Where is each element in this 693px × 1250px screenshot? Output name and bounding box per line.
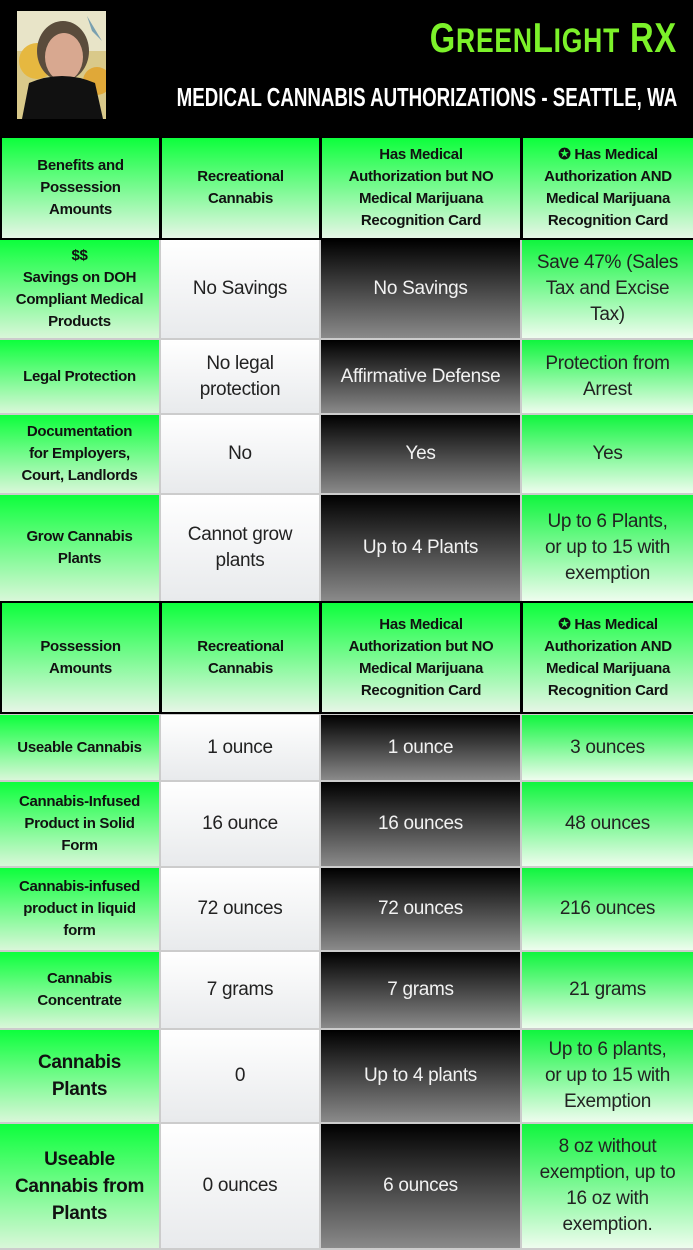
header row 2 <box>0 601 693 714</box>
header row 1: Medical Marijuana <box>546 190 670 207</box>
row: liquid form: 72 ounces <box>198 898 282 919</box>
subtitle: MEDICAL CANNABIS AUTHORIZATIONS - SEATTLE, WA <box>176 82 677 112</box>
header row 1: Recognition Card <box>548 212 668 229</box>
header row 2: Cannabis <box>208 660 273 676</box>
row: useable from plants: exemption, up to <box>540 1162 675 1183</box>
header row 1: ✪ Has Medical <box>558 146 658 163</box>
row: solid form: 16 ounce <box>202 813 278 834</box>
header row 1: Has Medical <box>379 146 463 163</box>
row: legal protection: Protection from <box>545 352 670 374</box>
title: GREENLIGHT RX <box>430 14 677 61</box>
row: liquid form: 216 ounces <box>560 898 655 919</box>
row: cannabis plants: 0 <box>235 1065 245 1086</box>
header row 2: Recognition Card <box>361 682 481 698</box>
row: savings: Save 47% (Sales <box>537 252 678 273</box>
row: solid form <box>0 782 693 866</box>
row: grow plants: Grow Cannabis <box>26 528 133 545</box>
row: savings: No Savings <box>373 278 468 299</box>
row: legal protection: Affirmative Defense <box>341 366 500 386</box>
row: grow plants: Cannot grow <box>188 524 292 545</box>
row: legal protection: No legal <box>206 352 274 374</box>
row: concentrate: Cannabis <box>47 970 112 987</box>
row: grow plants <box>0 495 693 601</box>
row: savings: Tax and Excise <box>546 278 669 299</box>
row: useable cannabis: 3 ounces <box>570 736 645 758</box>
header row 1: Amounts <box>49 201 112 218</box>
row: savings: Tax) <box>590 304 625 325</box>
row: useable cannabis: 1 ounce <box>207 736 273 758</box>
row: legal protection: Arrest <box>583 378 632 400</box>
header row 1 <box>0 136 693 240</box>
row: useable from plants: 6 ounces <box>383 1175 458 1196</box>
row: legal protection: protection <box>200 378 280 400</box>
row: savings <box>0 240 693 338</box>
row: savings: Savings on DOH <box>23 269 136 286</box>
row: cannabis plants: Exemption <box>564 1091 651 1112</box>
row: cannabis plants <box>0 1030 693 1122</box>
row: useable from plants: 8 oz without <box>559 1136 656 1157</box>
row: useable from plants: exemption. <box>563 1214 652 1235</box>
row: documentation: for Employers, <box>29 445 130 462</box>
row: documentation: Yes <box>592 443 623 464</box>
header row 1: Authorization AND <box>544 168 672 185</box>
row: savings: Compliant Medical <box>16 291 143 308</box>
row: liquid form <box>0 868 693 950</box>
header row 1: Cannabis <box>208 190 273 207</box>
row: concentrate: 7 grams <box>387 979 454 1000</box>
row: liquid form: Cannabis-infused <box>19 878 140 895</box>
header row 1: Medical Marijuana <box>359 190 483 207</box>
row: useable from plants: Cannabis from <box>15 1176 144 1196</box>
header row 2: Authorization but NO <box>349 638 493 654</box>
row: savings: $$ <box>71 247 88 264</box>
row: cannabis plants: Up to 4 plants <box>364 1065 477 1086</box>
photo <box>17 11 106 119</box>
header row 2: Recreational <box>197 638 284 654</box>
row: legal protection <box>0 340 693 413</box>
row: concentrate <box>0 952 693 1028</box>
row: liquid form: form <box>63 922 96 939</box>
row: useable from plants: Useable <box>44 1148 115 1170</box>
row: useable cannabis: 1 ounce <box>388 736 453 758</box>
header row 2: ✪ Has Medical <box>558 616 658 632</box>
row: documentation: Documentation <box>27 423 132 440</box>
row: liquid form: product in liquid <box>23 900 136 917</box>
row: useable from plants: 16 oz with <box>566 1188 649 1209</box>
header row 1: Possession <box>40 179 121 196</box>
header row 2: Amounts <box>49 660 112 676</box>
row: useable cannabis <box>0 715 693 780</box>
row: useable from plants: Plants <box>52 1202 107 1224</box>
row: useable from plants <box>0 1124 693 1248</box>
row: grow plants: exemption <box>565 563 650 584</box>
row: solid form: Form <box>61 837 98 854</box>
header banner <box>0 0 693 136</box>
row: grow plants: Up to 4 Plants <box>363 537 478 558</box>
row: savings: Products <box>48 313 111 330</box>
row: documentation: Court, Landlords <box>21 467 138 484</box>
row: cannabis plants: Up to 6 plants, <box>548 1039 667 1060</box>
row: grow plants: Up to 6 Plants, <box>547 511 668 532</box>
row: liquid form: 72 ounces <box>378 898 463 919</box>
header row 2: Authorization AND <box>544 638 672 654</box>
row: concentrate: 7 grams <box>207 979 273 1000</box>
header row 1: Recreational <box>197 168 284 185</box>
header row 2: Possession <box>40 638 121 654</box>
row: cannabis plants: or up to 15 with <box>545 1065 670 1086</box>
row: solid form: Product in Solid <box>24 815 135 832</box>
header row 2: Recognition Card <box>548 682 668 698</box>
row: useable from plants: 0 ounces <box>203 1175 277 1196</box>
header row 2: Medical Marijuana <box>546 660 670 676</box>
row: concentrate: 21 grams <box>569 979 646 1000</box>
row: documentation: No <box>228 443 252 464</box>
row: concentrate: Concentrate <box>37 992 122 1009</box>
row: grow plants: or up to 15 with <box>545 537 670 558</box>
header row 1: Authorization but NO <box>349 168 493 185</box>
header row 2: Has Medical <box>379 616 463 632</box>
header row 2: Medical Marijuana <box>359 660 483 676</box>
row: solid form: 16 ounces <box>378 813 463 834</box>
header row 1: Benefits and <box>37 157 124 174</box>
row: documentation: Yes <box>405 443 436 464</box>
row: cannabis plants: Cannabis <box>38 1052 121 1073</box>
row: savings: No Savings <box>193 278 287 299</box>
row: grow plants: plants <box>216 550 264 571</box>
row: grow plants: Plants <box>58 550 101 567</box>
row: solid form: Cannabis-Infused <box>19 793 140 810</box>
row: useable cannabis: Useable Cannabis <box>17 738 142 756</box>
row: documentation <box>0 415 693 493</box>
row: legal protection: Legal Protection <box>23 368 136 384</box>
row: solid form: 48 ounces <box>565 813 650 834</box>
row: cannabis plants: Plants <box>52 1079 107 1100</box>
header row 1: Recognition Card <box>361 212 481 229</box>
